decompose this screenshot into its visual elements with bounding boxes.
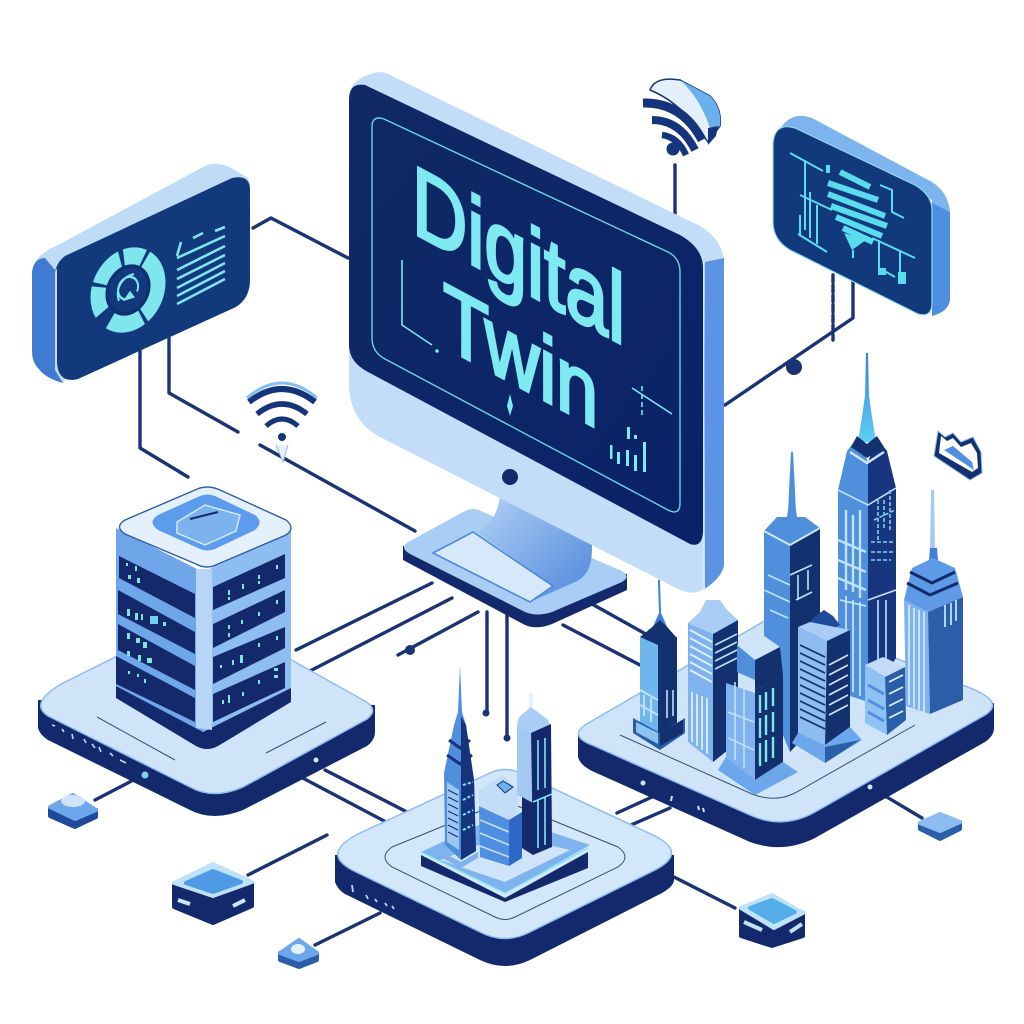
stand plate xyxy=(433,532,553,602)
device: small right xyxy=(920,814,960,839)
rack left panels xyxy=(116,556,195,722)
line node dots xyxy=(405,359,802,742)
tower: front right small xyxy=(865,657,906,735)
spire tower xyxy=(444,665,476,860)
server status leds xyxy=(126,563,278,704)
server rack xyxy=(116,487,291,749)
wifi: top right xyxy=(643,79,720,156)
monitor screen xyxy=(349,85,703,545)
city skyline xyxy=(633,353,963,795)
server top cap xyxy=(120,487,291,567)
device: small left xyxy=(50,795,96,827)
screen chart marks xyxy=(402,260,672,472)
tower: empire tall xyxy=(838,353,896,702)
mid block xyxy=(479,806,509,866)
tower: front dark xyxy=(718,633,798,795)
icon: cloud card xyxy=(934,431,982,480)
tall right tower xyxy=(529,693,533,710)
tower: right striped xyxy=(904,490,963,714)
tower: centre striped xyxy=(792,610,862,763)
monitor button xyxy=(502,469,518,485)
monitor side xyxy=(703,258,724,590)
stand neck xyxy=(477,490,592,602)
platform: centre xyxy=(335,770,674,966)
device: chip xyxy=(280,940,317,967)
rack right panels xyxy=(213,554,285,722)
connection lines xyxy=(95,165,922,945)
text lines xyxy=(177,227,225,304)
tower: small left xyxy=(633,580,685,750)
panel: right schematic xyxy=(773,116,950,316)
gauge icon xyxy=(98,250,158,330)
device: hub right xyxy=(741,895,803,946)
monitor xyxy=(349,72,724,593)
server body xyxy=(116,528,203,732)
central mini city xyxy=(421,665,590,902)
base plate xyxy=(421,852,588,902)
schematic drawing xyxy=(790,153,915,277)
screen frame xyxy=(372,118,680,512)
device: hub left xyxy=(174,864,252,923)
title: Twin: Twin xyxy=(443,263,598,449)
panel: left dashboard xyxy=(32,164,250,383)
tower: second spire xyxy=(764,452,820,752)
wifi: left xyxy=(247,383,317,462)
title: Digital: Digital xyxy=(412,144,625,367)
monitor shell xyxy=(349,72,724,593)
server base xyxy=(116,672,291,749)
platform: city xyxy=(578,612,994,847)
tower: striped block xyxy=(688,600,738,762)
platform: server base xyxy=(38,616,375,816)
monitor stand xyxy=(403,490,627,627)
